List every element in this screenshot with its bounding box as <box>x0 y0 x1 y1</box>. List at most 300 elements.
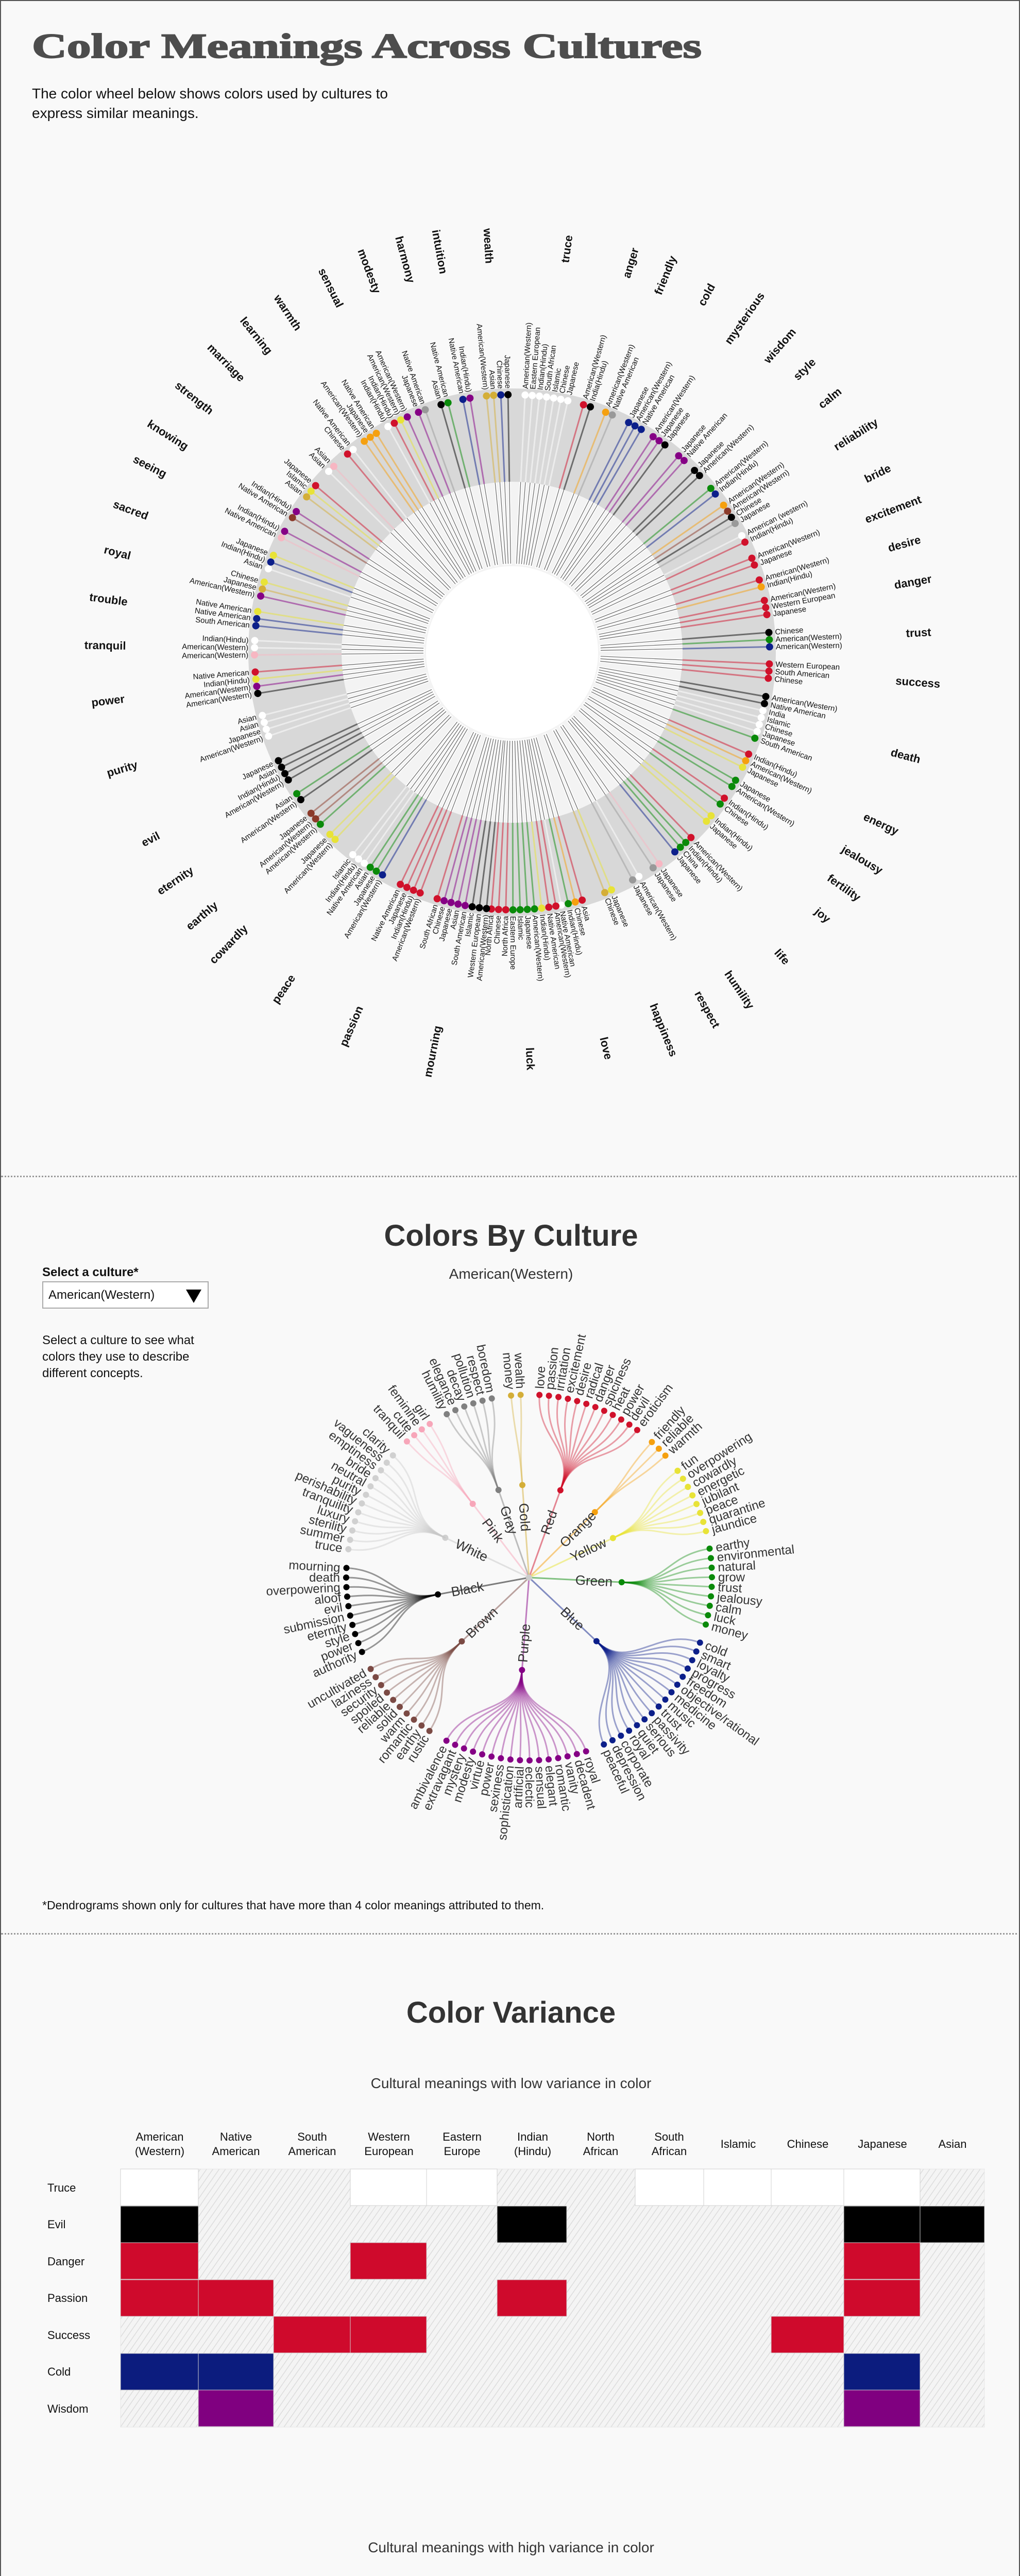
dendrogram: meaning leaf labels: royal <box>581 1755 603 1785</box>
wheel: meaning labels: marriage <box>205 341 247 384</box>
low table column headers: African <box>652 2145 687 2158</box>
dendrogram: meaning leaf labels: modesty <box>450 1755 478 1804</box>
footnote: *Dendrograms shown only for cultures that have more than 4 color meanings attributed to them. <box>42 1899 544 1912</box>
wheel: culture dots and labels: Indian(Hindu) <box>202 634 249 645</box>
dendrogram: meaning leaf labels: rustic <box>404 1733 432 1765</box>
wheel: culture dots and labels: China <box>681 849 701 871</box>
dendrogram: meaning leaf labels: neutral <box>329 1459 368 1489</box>
table: low variance: Cultural meanings with low variance in color <box>371 2075 651 2091</box>
wheel: culture dots and labels: Indian(Hindu) <box>766 569 813 590</box>
dendrogram: meaning leaf labels: heat <box>609 1385 633 1413</box>
wheel: culture dots and labels: American(Western) <box>770 582 837 604</box>
dendrogram: meaning leaf labels: cold <box>703 1638 729 1659</box>
dendrogram: meaning leaf labels: natural <box>718 1558 756 1574</box>
wheel: meaning labels: life <box>772 946 792 967</box>
dendrogram: color name labels: Red <box>537 1508 560 1536</box>
wheel: meaning labels: wealth <box>481 227 496 264</box>
wheel: culture dots and labels: Japanese <box>665 411 692 443</box>
wheel: culture dots and labels: Indian(Hindu) <box>220 540 266 564</box>
wheel: meaning labels: trouble <box>89 590 128 608</box>
wheel: culture dots and labels: Indian(Hindu) <box>457 346 473 393</box>
wheel: culture dots and labels: American (western) <box>745 499 809 537</box>
dendrogram: meaning leaf labels: fun <box>678 1452 701 1473</box>
wheel: culture dots and labels: Asian <box>353 870 371 891</box>
wheel: meaning labels: danger <box>893 572 933 591</box>
dendrogram: meaning leaf labels: trust <box>718 1581 742 1596</box>
wheel: culture dots and labels: Japanese <box>659 867 685 899</box>
dendrogram: color name labels: Gray <box>497 1504 521 1536</box>
low table column headers: South <box>654 2130 684 2143</box>
dendrogram: meaning leaf labels: perishability <box>294 1468 359 1507</box>
dendrogram: meaning leaf labels: eclectic <box>522 1767 536 1808</box>
low table column headers: Western <box>368 2130 410 2143</box>
wheel: culture dots and labels: Japanese <box>282 457 314 485</box>
dendrogram: meaning leaf labels: humility <box>419 1368 450 1412</box>
wheel: culture dots and labels: India <box>768 708 787 720</box>
wheel: meaning labels: cowardly <box>207 922 250 967</box>
wheel: culture dots and labels: American(Western) <box>319 379 364 439</box>
dendrogram: meaning leaf labels: grow <box>718 1570 745 1584</box>
wheel: meaning labels: mourning <box>421 1025 444 1078</box>
wheel: culture dots and labels: American(Western) <box>373 349 409 413</box>
dendrogram: meaning leaf labels: peaceful <box>600 1748 632 1795</box>
wheel: culture dots and labels: Japanese <box>708 822 739 851</box>
low table column headers: Japanese <box>858 2138 907 2150</box>
wheel: culture dots and labels: Chinese <box>735 496 763 518</box>
intro text <box>32 86 388 121</box>
dendrogram: meaning leaf labels: decay <box>444 1367 468 1403</box>
wheel: culture dots and labels: Japanese <box>738 500 772 524</box>
wheel: culture dots and labels: American(Western) <box>258 820 314 869</box>
dendrogram: meaning leaf labels: trust <box>658 1706 685 1733</box>
wheel: culture dots and labels: American(Western) <box>223 779 285 820</box>
dendrogram: color name labels <box>450 1502 613 1663</box>
dendrogram subtitle: American(Western) <box>449 1266 573 1282</box>
dendrogram: meaning leaf labels: style <box>323 1630 351 1651</box>
wheel: meaning labels: excitement <box>863 493 923 526</box>
dendrogram: meaning leaf labels: eroticism <box>636 1381 676 1429</box>
dendrogram: meaning leaf labels: jaundice <box>710 1512 758 1537</box>
wheel: culture dots and labels: Native American <box>325 866 365 917</box>
wheel: culture dots and labels: Native American <box>237 482 290 518</box>
wheel: culture dots and labels: Chinese <box>492 916 503 944</box>
wheel: culture dots and labels: Chinese <box>774 675 803 686</box>
low table row labels: Passion <box>47 2292 88 2304</box>
wheel: culture dots and labels: Indian(Hindu) <box>536 343 550 391</box>
wheel: culture dots and labels: Japanese <box>632 884 655 917</box>
wheel: culture dots and labels: Indian(Hindu) <box>389 894 415 941</box>
wheel: meaning labels: mysterious <box>722 290 767 347</box>
wheel: meaning labels: trust <box>906 625 932 640</box>
wheel: culture dots and labels: American(Western) <box>726 461 786 505</box>
wheel: culture dots and labels: Indian(Hindu) <box>713 817 754 853</box>
wheel: culture dots and labels: American(Western) <box>771 693 838 714</box>
dendrogram: meaning leaf labels: purity <box>330 1472 364 1498</box>
dendrogram: meaning leaf labels: power <box>619 1382 648 1418</box>
dendrogram branches <box>337 1384 717 1769</box>
wheel: culture dots and labels: American(Western) <box>282 841 334 895</box>
wheel: meaning labels: sensual <box>316 266 346 310</box>
table: low variance <box>47 2075 984 2427</box>
selector help text: different concepts. <box>42 1366 143 1380</box>
dendrogram: meaning leaf labels: energetic <box>695 1464 746 1499</box>
dendrogram: meaning leaf labels: romantic <box>552 1763 573 1812</box>
low table column headers: Native <box>220 2130 252 2143</box>
low table column headers: American <box>212 2145 260 2158</box>
wheel: culture dots and labels: Chinese <box>572 907 588 937</box>
dendrogram: color name labels: Gold <box>516 1502 533 1532</box>
wheel: culture dots and labels <box>182 322 842 981</box>
wheel: culture dots and labels: American(Western) <box>764 555 830 583</box>
dendrogram: meaning leaf labels: sophistication <box>496 1765 517 1841</box>
dendrogram: meaning leaf labels: passivity <box>651 1713 693 1758</box>
low table column headers: European <box>364 2145 414 2158</box>
wheel: culture dots and labels: Japanese <box>223 575 258 592</box>
wheel: meaning labels: seeing <box>131 452 169 480</box>
table: high variance: Cultural meanings with high variance in color <box>368 2539 654 2555</box>
wheel: meaning labels: fertility <box>825 872 863 904</box>
dendrogram: meaning leaf labels: earthy <box>393 1726 424 1762</box>
low table column headers: South <box>297 2130 327 2143</box>
dendrogram: meaning leaf labels: reliable <box>354 1699 394 1736</box>
wheel: culture dots and labels: Japanese <box>227 727 262 745</box>
dendrogram: meaning leaf labels: jealousy <box>716 1590 763 1609</box>
wheel: culture dots and labels: Native American <box>311 398 352 448</box>
wheel: meaning labels: anger <box>620 246 641 280</box>
wheel: meaning labels: passion <box>337 1004 366 1048</box>
low table column headers: Chinese <box>787 2138 828 2150</box>
wheel: culture dots and labels: Asian <box>236 713 258 726</box>
dendrogram: color name labels: Purple <box>515 1623 533 1663</box>
intro text: express similar meanings. <box>32 105 199 121</box>
dendrogram: meaning leaf labels: tranquility <box>300 1485 355 1517</box>
dendrogram: meaning leaf labels: depression <box>609 1743 649 1803</box>
dendrogram: meaning leaf labels: extravagant <box>420 1748 460 1812</box>
wheel: culture dots and labels: American(Western) <box>184 683 251 701</box>
low table column headers: Indian <box>517 2130 548 2143</box>
wheel: culture dots and labels: Chinese <box>322 425 347 452</box>
dendrogram: meaning leaf labels: quarantine <box>707 1496 767 1527</box>
wheel: culture dots and labels: American(Western) <box>756 528 821 561</box>
dendrogram: meaning leaf labels: pollution <box>451 1351 478 1400</box>
wheel: culture dots and labels: Islamic <box>516 916 525 940</box>
wheel: culture dots and labels: Japanese <box>609 894 631 928</box>
wheel: culture dots and labels: Indian(Hindu) <box>727 798 770 832</box>
dendrogram: meaning leaf labels: warmth <box>665 1419 705 1457</box>
dendrogram: color name labels: Pink <box>479 1515 507 1546</box>
wheel: culture dots and labels: American(Western) <box>701 423 756 474</box>
low table column headers: Asian <box>938 2138 967 2150</box>
wheel: culture dots and labels: Japanese <box>759 548 793 567</box>
wheel: culture dots and labels: Islamic <box>331 857 353 882</box>
wheel: culture dots and labels: Asian <box>257 766 278 783</box>
wheel: culture dots and labels: Chinese <box>558 365 572 394</box>
wheel: culture dots and labels: Japanese <box>438 908 454 942</box>
wheel: culture dots and labels: Native American <box>224 506 278 539</box>
wheel: meaning labels: humility <box>722 968 757 1012</box>
wheel: meaning labels: evil <box>139 829 162 849</box>
section title: color variance: Color Variance <box>406 1996 616 2029</box>
dendrogram: meaning leaf labels: romantic <box>375 1720 416 1766</box>
wheel: meaning labels: harmony <box>393 235 418 285</box>
wheel: culture dots and labels: Native American <box>611 356 641 411</box>
low table cells <box>121 2169 984 2427</box>
wheel: meaning labels: death <box>889 745 922 766</box>
selector help text <box>42 1333 194 1380</box>
low table row labels: Success <box>47 2329 90 2342</box>
dendrogram: meaning leaf labels: mystery <box>440 1752 468 1797</box>
wheel: culture dots and labels: Japanese <box>761 730 796 748</box>
wheel: culture dots and labels: South American <box>759 736 813 763</box>
wheel: culture dots and labels: American(Western) <box>692 839 744 893</box>
title: Color Meanings Across Cultures <box>32 26 702 65</box>
dropdown: American(Western) <box>48 1288 155 1302</box>
low table row labels: Wisdom <box>47 2402 88 2415</box>
wheel: meaning labels <box>84 227 941 1078</box>
dendrogram: color name labels: Orange <box>556 1508 599 1550</box>
wheel: meaning labels: respect <box>692 989 723 1030</box>
wheel: culture dots and labels: American(Western) <box>653 374 696 434</box>
wheel: culture dots and labels: Islamic <box>551 367 563 393</box>
dendrogram: meaning leaf labels: respect <box>464 1354 487 1397</box>
wheel: culture dots and labels: Asian <box>313 445 332 465</box>
wheel: culture dots and labels: North Africa <box>484 914 496 956</box>
wheel: culture dots and labels: American(Western) <box>475 914 490 981</box>
dendrogram: meaning leaf labels: danger <box>591 1363 618 1404</box>
wheel: culture dots and labels: American(Western) <box>343 878 383 940</box>
wheel: culture dots and labels: Japanese <box>696 439 726 469</box>
dendrogram: meaning leaf labels: power <box>319 1639 355 1664</box>
wheel: culture dots and labels: Islamic <box>464 912 476 937</box>
wheel: culture dots and labels: Asian <box>239 720 260 734</box>
wheel: meaning labels: truce <box>558 234 575 264</box>
wheel: culture dots and labels: American(Western) <box>552 911 572 978</box>
dendrogram: meaning leaf labels: sterility <box>308 1513 348 1536</box>
wheel: culture dots and labels: Asian <box>449 909 461 930</box>
wheel: culture dots and labels: American(Western) <box>775 632 842 644</box>
wheel: culture dots and labels: Chinese <box>603 897 621 926</box>
wheel: meaning labels: peace <box>269 972 298 1006</box>
dendrogram: meaning leaf labels: radical <box>582 1361 606 1400</box>
dendrogram: meaning leaf labels: security <box>338 1683 380 1720</box>
dendrogram: meaning leaf labels: vanity <box>562 1761 582 1795</box>
wheel: culture dots and labels: Native American <box>428 341 450 398</box>
wheel: culture dots and labels: South African <box>418 904 440 950</box>
dendrogram: colors by culture <box>266 1333 795 1841</box>
wheel: culture dots and labels: Japanese <box>345 402 370 435</box>
wheel: culture dots and labels: Indian(Hindu) <box>203 676 250 689</box>
dendrogram: meaning leaf labels: progress <box>689 1666 738 1702</box>
wheel: culture dots and labels: Chinese <box>431 906 447 935</box>
wheel: culture dots and labels: Indian(Hindu) <box>687 844 724 885</box>
wheel: culture dots and labels: American(Western) <box>750 759 813 795</box>
dendrogram: color name labels: Yellow <box>568 1534 609 1565</box>
dropdown <box>42 1281 209 1309</box>
low table column headers: (Western) <box>135 2145 184 2158</box>
dendrogram: meaning leaf labels: calm <box>715 1600 743 1618</box>
dendrogram: meaning leaf labels: loyalty <box>694 1657 732 1685</box>
dendrogram: meaning leaf labels: devil <box>627 1395 653 1423</box>
dendrogram: meaning leaf labels: evil <box>323 1601 344 1617</box>
wheel: culture dots and labels: Indian(Hindu) <box>749 516 794 544</box>
wheel: meaning labels: style <box>791 355 818 383</box>
dendrogram: meaning leaf labels: objective/rational <box>678 1683 761 1749</box>
wheel: meaning labels: modesty <box>355 247 384 296</box>
wheel: meaning labels: reliability <box>831 415 880 453</box>
dendrogram: meaning leaf labels: sensual <box>532 1766 549 1809</box>
dendrogram: meaning leaf labels: virtue <box>466 1758 487 1791</box>
wheel: meaning labels: purity <box>105 758 140 779</box>
dendrogram: meaning leaf labels: luck <box>712 1610 738 1628</box>
wheel: culture dots and labels: Chinese <box>230 569 260 585</box>
dendrogram: meaning leaf labels: boredom <box>473 1343 497 1394</box>
wheel: culture dots and labels: American(Western) <box>638 880 678 942</box>
wheel: meaning labels: cold <box>695 281 718 308</box>
dendrogram: meaning leaf labels: cowardly <box>690 1454 739 1490</box>
wheel: culture dots and labels: Western European <box>466 913 483 978</box>
wheel: meaning labels: royal <box>103 543 132 562</box>
wheel: culture dots and labels: Native American <box>545 913 562 970</box>
wheel: culture dots and labels: Indian(Hindu) <box>366 375 395 420</box>
dendrogram: meaning leaf labels: warm <box>377 1714 408 1745</box>
dendrogram: meaning leaf labels: elegance <box>426 1356 459 1408</box>
wheel: culture dots and labels: Indian(Hindu) <box>565 909 584 956</box>
wheel: culture dots and labels: Japanese <box>503 355 512 388</box>
wheel: meaning labels: bride <box>862 462 893 485</box>
wheel: culture dots and labels: American(Western) <box>390 897 422 962</box>
dendrogram: color name labels: Blue <box>557 1604 588 1633</box>
low table column headers: African <box>583 2145 618 2158</box>
wheel: culture dots and labels: American(Western) <box>713 439 770 488</box>
wheel: culture dots and labels: Native American <box>641 374 676 427</box>
dendrogram: meaning leaf labels: quiet <box>635 1726 662 1756</box>
dendrogram: meaning leaf labels: summer <box>299 1523 346 1546</box>
wheel: meaning labels: knowing <box>145 417 191 453</box>
dendrogram: meaning leaf labels: wealth <box>512 1352 527 1389</box>
wheel: culture dots and labels: Asian <box>273 793 294 811</box>
wheel: culture dots and labels: Indian(Hindu) <box>359 379 388 423</box>
dendrogram: meaning leaf labels: friendly <box>651 1403 688 1443</box>
dendrogram: meaning leaf labels: freedom <box>684 1674 729 1711</box>
dendrogram: meaning leaf labels: feminine <box>385 1383 423 1429</box>
wheel: meaning labels: earthly <box>183 899 220 933</box>
wheel: culture dots and labels: Japanese <box>523 916 534 950</box>
dendrogram: meaning leaf labels: spoiled <box>347 1691 387 1727</box>
wheel: culture dots and labels: Eastern European <box>529 327 542 389</box>
dendrogram: meaning leaf labels: overpowering <box>266 1581 341 1599</box>
wheel: culture dots and labels: Asia <box>580 905 592 922</box>
wheel: culture dots and labels: American(Western) <box>474 323 490 390</box>
wheel: culture dots and labels: Eastern Europe <box>508 916 517 970</box>
wheel: meaning labels: joy <box>812 905 834 926</box>
wheel: meaning labels: desire <box>887 533 922 554</box>
wheel: culture dots and labels: Chinese <box>775 626 804 637</box>
dendrogram: color name labels: White <box>453 1536 490 1565</box>
wheel: meaning labels: tranquil <box>84 639 126 652</box>
dendrogram: meaning leaf labels: corporate <box>618 1738 656 1790</box>
wheel: meaning labels: calm <box>815 385 844 411</box>
wheel: culture dots and labels: American(Western) <box>634 360 674 422</box>
dendrogram: meaning leaf labels: excitement <box>563 1333 589 1394</box>
dendrogram: meaning leaf labels: clarity <box>360 1425 393 1456</box>
wheel: meaning labels: energy <box>861 810 901 838</box>
wheel: culture dots and labels: Japanese <box>653 871 678 904</box>
dendrogram: color name labels: Brown <box>463 1604 501 1641</box>
dendrogram: meaning leaf labels: serious <box>643 1720 679 1759</box>
wheel: meaning labels: love <box>597 1036 615 1061</box>
dendrogram: meaning leaf labels: power <box>477 1761 497 1797</box>
dendrogram: meaning leaf labels: aloof <box>314 1590 342 1607</box>
wheel: culture dots and labels: Indian(Hindu) <box>718 459 760 494</box>
wheel: meaning labels: happiness <box>647 1002 680 1058</box>
low table column headers: (Hindu) <box>514 2145 551 2158</box>
wheel: culture dots and labels: American(Western) <box>604 343 636 408</box>
wheel: meaning labels: jealousy <box>839 842 886 877</box>
wheel: culture dots and labels: American(Western) <box>581 334 608 400</box>
wheel: meaning labels: eternity <box>155 863 196 897</box>
dendrogram: meaning leaf labels: artificial <box>511 1766 527 1809</box>
wheel: culture dots and labels: American(Western) <box>189 576 256 599</box>
wheel: culture dots and labels: Asian <box>243 556 264 571</box>
dendrogram: meaning leaf labels: submission <box>282 1611 346 1637</box>
dendrogram: meaning leaf labels: authority <box>310 1648 359 1681</box>
wheel: culture dots and labels: Indian(Hindu) <box>250 480 293 512</box>
dendrogram: meaning leaf labels: cute <box>390 1408 416 1435</box>
wheel: meaning labels: power <box>91 692 126 709</box>
wheel: culture dots and labels: South American <box>195 616 250 630</box>
dendrogram: color name labels: Black <box>450 1578 485 1600</box>
color wheel chart <box>84 227 941 1078</box>
dendrogram: meaning leaf labels: jubilant <box>699 1480 741 1509</box>
low table row labels: Cold <box>47 2365 71 2378</box>
wheel: culture dots and labels: Western European <box>775 660 840 672</box>
dendrogram: meaning leaf labels: laziness <box>329 1675 375 1711</box>
low table column headers: Islamic <box>721 2138 756 2150</box>
wheel: meaning labels: friendly <box>652 253 679 297</box>
dendrogram: meaning leaf labels: ambivalence <box>406 1743 450 1811</box>
low table row labels: Truce <box>47 2181 76 2194</box>
dendrogram: meaning leaf labels: sexiness <box>486 1764 507 1813</box>
wheel: meaning labels: wisdom <box>761 326 798 366</box>
wheel: culture dots and labels: American(Western) <box>185 690 252 709</box>
dendrogram: meaning leaf labels: mourning <box>288 1558 341 1575</box>
wheel: culture dots and labels: Japanese <box>772 605 807 618</box>
dendrogram: meaning leaf labels: music <box>665 1699 699 1731</box>
dendrogram: meaning leaf labels: girl <box>412 1401 432 1422</box>
wheel: culture dots and labels: Indian(Hindu) <box>324 861 359 904</box>
wheel: culture dots and labels: Asian <box>430 379 444 400</box>
wheel: culture dots and labels: American(Western) <box>198 734 264 764</box>
section title: colors by culture: Colors By Culture <box>384 1219 638 1252</box>
wheel: culture dots and labels: Asian <box>283 478 304 497</box>
wheel: culture dots and labels: Indian(Hindu) <box>753 753 798 779</box>
wheel: culture dots and labels: South American <box>450 911 469 966</box>
wheel: culture dots and labels: North Africa <box>501 916 511 956</box>
wheel: culture dots and labels: Native American <box>369 888 402 943</box>
wheel: culture dots and labels: Japanese <box>739 780 772 804</box>
wheel: culture dots and labels: Indian(Hindu) <box>538 914 552 961</box>
wheel: meaning labels: learning <box>237 314 275 357</box>
wheel: culture dots and labels: American(Western) <box>730 468 791 512</box>
wheel: culture dots and labels: Native American <box>685 411 729 459</box>
wheel: culture dots and labels: American(Western) <box>735 786 796 828</box>
low table row labels <box>47 2181 90 2415</box>
dendrogram: meaning leaf labels: vagueness <box>331 1416 386 1464</box>
wheel: culture dots and labels: Japanese <box>675 854 703 886</box>
dendrogram: meaning leaf labels: solid <box>372 1706 400 1734</box>
dendrogram: meaning leaf labels: desire <box>572 1361 594 1397</box>
wheel: culture dots and labels: Native American <box>339 378 377 431</box>
